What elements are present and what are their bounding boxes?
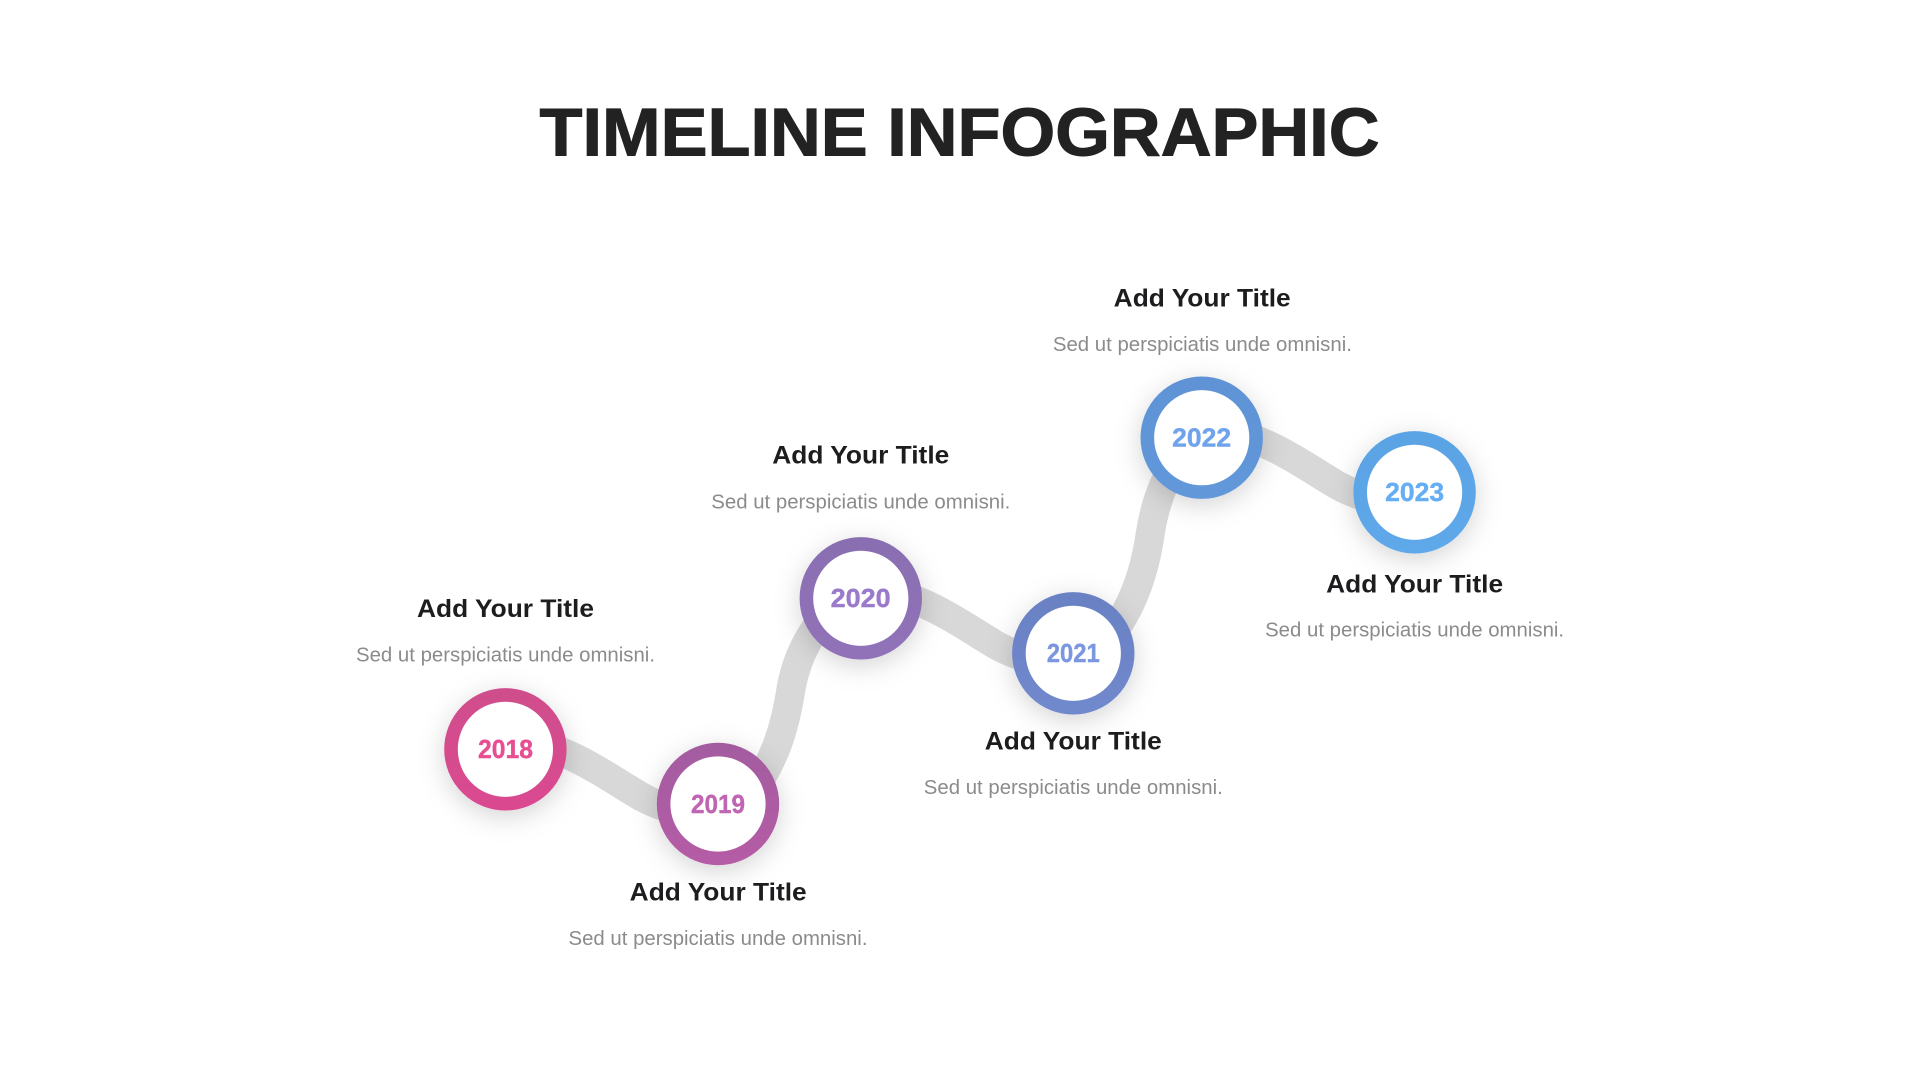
connector 2019 to 2020 [745, 590, 850, 800]
milestone 2020 [711, 442, 1010, 653]
year 2021: 2021 [1047, 640, 1100, 668]
ring 2023 [1360, 438, 1469, 547]
heading 2023: Add Your Title [1326, 570, 1503, 598]
heading 2020: Add Your Title [772, 442, 949, 470]
year 2022: 2022 [1172, 425, 1231, 453]
heading 2019: Add Your Title [630, 879, 807, 907]
connector ribbon [505, 427, 1415, 813]
description 2022: Sed ut perspiciatis unde omnisni. [1053, 334, 1352, 356]
title: TIMELINE INFOGRAPHIC [540, 94, 1380, 170]
ring 2021 [1019, 599, 1128, 708]
description 2018: Sed ut perspiciatis unde omnisni. [356, 645, 655, 667]
year 2023: 2023 [1385, 479, 1444, 507]
connector 2018 to 2019 [505, 738, 718, 813]
milestone 2019 [568, 750, 868, 950]
heading 2021: Add Your Title [985, 728, 1162, 756]
milestone 2022 [1053, 285, 1352, 492]
description 2021: Sed ut perspiciatis unde omnisni. [924, 777, 1223, 799]
description 2023: Sed ut perspiciatis unde omnisni. [1265, 619, 1564, 641]
ring 2022 [1147, 383, 1256, 492]
milestone 2021 [924, 599, 1223, 799]
ring 2018 [451, 695, 560, 804]
connector 2021 to 2022 [1098, 435, 1195, 650]
connector 2022 to 2023 [1202, 427, 1415, 502]
milestone 2018 [356, 595, 655, 804]
ring 2019 [664, 750, 772, 858]
milestone 2023 [1265, 438, 1564, 641]
ring 2020 [806, 544, 915, 653]
year 2020: 2020 [831, 585, 891, 613]
year 2019: 2019 [691, 791, 745, 819]
description 2019: Sed ut perspiciatis unde omnisni. [568, 928, 868, 950]
description 2020: Sed ut perspiciatis unde omnisni. [711, 492, 1010, 514]
heading 2022: Add Your Title [1114, 285, 1291, 313]
year 2018: 2018 [478, 736, 533, 764]
heading 2018: Add Your Title [417, 595, 594, 623]
connector 2020 to 2021 [861, 587, 1074, 662]
